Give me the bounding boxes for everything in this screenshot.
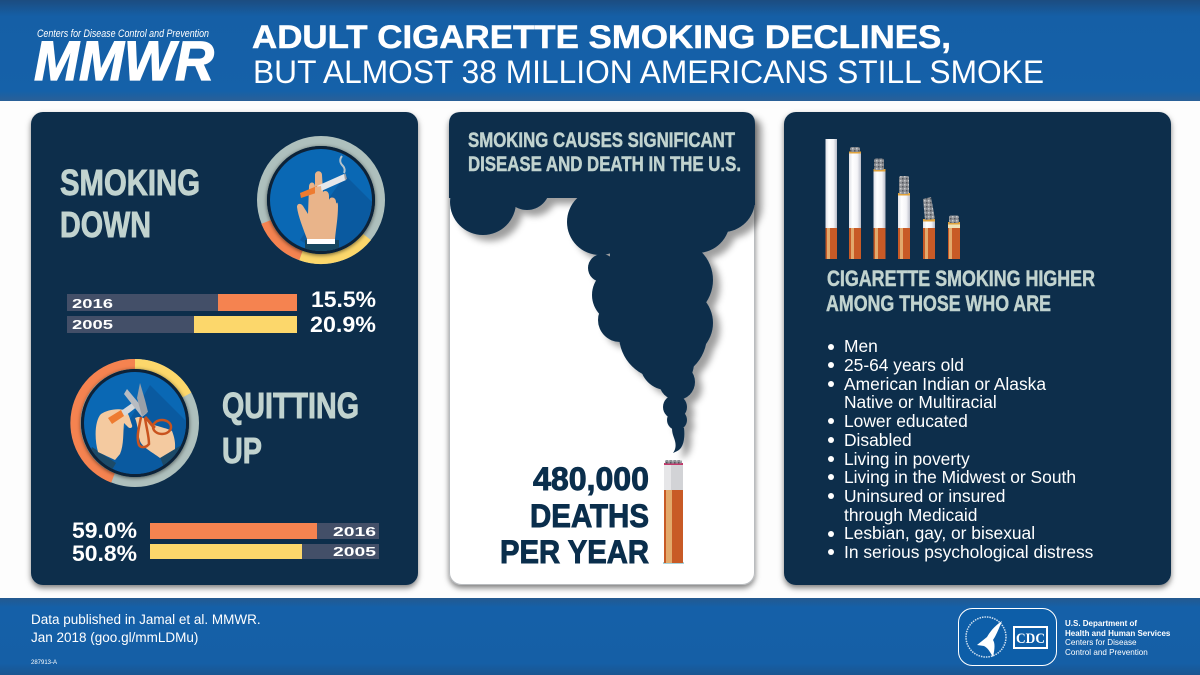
statistic: deaths per year <box>500 461 649 570</box>
heading: smoking down: DOWN <box>60 204 151 245</box>
icon: burning cigarette <box>663 460 684 564</box>
bar chart: quit rate: 59.0% <box>72 518 137 543</box>
left hand <box>96 409 132 460</box>
panel: deaths per year <box>449 112 755 584</box>
CDC logo: CDC <box>1016 631 1045 647</box>
bar chart: smoking prevalence: 2005 <box>72 317 113 332</box>
list: higher-risk groups: American Indian or Alaska <box>844 374 1046 394</box>
citation: Jan 2018 (goo.gl/mmLDMu) <box>31 630 198 645</box>
list: higher-risk groups: Native or Multiracial <box>844 392 997 412</box>
HHS text: Control and Prevention <box>1065 648 1148 657</box>
bar chart: smoking prevalence: 2016 <box>72 296 113 311</box>
scissors <box>124 389 147 417</box>
CDC logo <box>958 608 1056 666</box>
heading: smoking down <box>60 162 200 245</box>
heading: quitting up: QUITTING <box>222 385 359 426</box>
list: higher-risk groups: Living in poverty <box>844 449 970 469</box>
list: higher-risk groups <box>828 336 1094 562</box>
right hand <box>135 417 175 458</box>
citation: Data published in Jamal et al. MMWR. <box>31 612 261 627</box>
list: higher-risk groups: Lesbian, gay, or bisexual <box>844 523 1035 543</box>
list: higher-risk groups: In serious psychological distress <box>844 542 1094 562</box>
list: higher-risk groups: Disabled <box>844 430 912 450</box>
MMWR logo: Centers for Disease Control and Prevention <box>37 28 209 40</box>
title: BUT ALMOST 38 MILLION AMERICANS STILL SMOKE <box>253 54 1044 90</box>
cigarette <box>317 174 346 192</box>
heading: smoking causes disease: SMOKING CAUSES SIGNIFICANT <box>468 129 735 152</box>
HHS text <box>1065 619 1171 657</box>
title: ADULT CIGARETTE SMOKING DECLINES, <box>252 19 951 55</box>
icon: hands cutting cigarette with scissors <box>75 364 194 482</box>
list: higher-risk groups: Lower educated <box>844 411 968 431</box>
smoke cloud <box>449 112 755 453</box>
bar chart: quit rate: 50.8% <box>72 541 137 566</box>
list: higher-risk groups: 25-64 years old <box>844 355 964 375</box>
panel: smoking down and quitting up <box>31 112 418 585</box>
right sleeve <box>160 446 180 466</box>
list: higher-risk groups: through Medicaid <box>844 505 977 525</box>
cigarette stub <box>122 404 136 416</box>
bar chart: quit rate: 2016 <box>333 524 376 539</box>
list: higher-risk groups: Uninsured or insured <box>844 486 1005 506</box>
HHS text: Centers for Disease <box>1065 638 1137 647</box>
statistic: deaths per year: DEATHS <box>530 498 649 534</box>
cuff <box>307 239 335 244</box>
heading: smoking higher among <box>826 266 1095 316</box>
statistic: deaths per year: PER YEAR <box>500 534 649 570</box>
heading: smoking higher among: CIGARETTE SMOKING HIGHER <box>827 266 1095 291</box>
citation: 287913-A <box>31 660 57 666</box>
heading: quitting up: UP <box>222 430 262 471</box>
heading: smoking causes disease: DISEASE AND DEATH IN THE U.S. <box>468 153 741 176</box>
MMWR logo: MMWR <box>34 29 215 92</box>
citation <box>31 612 261 666</box>
list: higher-risk groups: Men <box>844 336 878 356</box>
title <box>252 19 1044 90</box>
list: higher-risk groups: Living in the Midwest or South <box>844 467 1076 487</box>
heading: quitting up <box>222 385 359 471</box>
footer banner <box>0 598 1200 675</box>
bar chart: smoking prevalence <box>67 287 376 337</box>
bar chart: quit rate: 2005 <box>333 544 376 559</box>
heading: smoking down: SMOKING <box>60 162 200 203</box>
icon: cigarettes burning down <box>826 139 960 259</box>
hand <box>297 171 338 239</box>
header banner <box>0 0 1200 101</box>
heading: smoking causes disease <box>468 129 741 176</box>
HHS text: U.S. Department of <box>1065 619 1137 628</box>
left sleeve <box>91 447 116 468</box>
bar chart: smoking prevalence: 20.9% <box>310 312 376 337</box>
bar chart: smoking prevalence: 15.5% <box>311 287 376 312</box>
statistic: deaths per year: 480,000 <box>533 461 649 497</box>
bar chart: quit rate <box>72 518 379 566</box>
HHS text: Health and Human Services <box>1065 629 1171 638</box>
heading: smoking higher among: AMONG THOSE WHO ARE <box>826 291 1051 316</box>
icon: hand holding cigarette <box>262 141 380 260</box>
panel: groups with higher smoking <box>784 112 1171 585</box>
